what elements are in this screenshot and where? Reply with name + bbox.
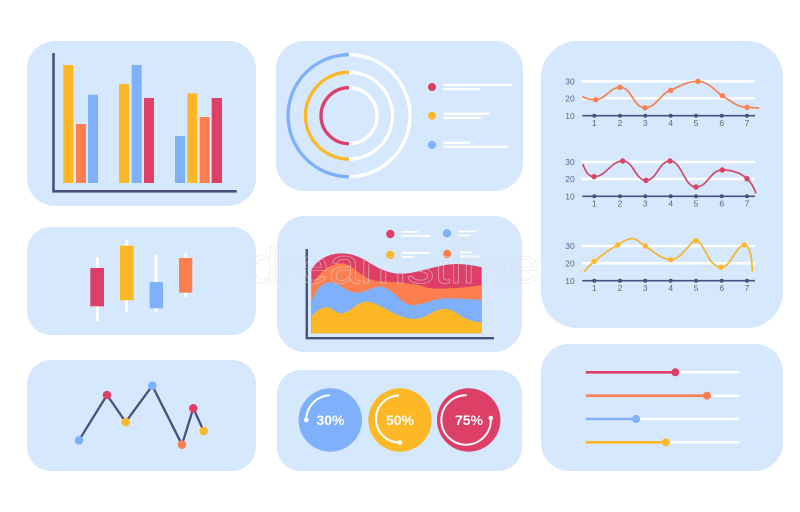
line chart: red: 1	[592, 199, 597, 209]
line chart: red: 5	[694, 199, 699, 209]
line chart: red: 2	[618, 199, 623, 209]
line chart: yellow: 5	[694, 283, 699, 293]
chart axes	[54, 53, 237, 191]
gauge: 75%: 75%	[455, 412, 484, 428]
panel background	[27, 227, 256, 335]
line chart: yellow: 2	[618, 283, 623, 293]
red candle	[90, 257, 104, 321]
line chart: yellow: 7	[745, 283, 750, 293]
line chart: orange: 3	[643, 118, 648, 128]
line chart: orange: 10	[565, 111, 575, 121]
middle ring	[306, 72, 392, 159]
panel: line charts	[541, 41, 783, 328]
slider: red	[586, 368, 739, 376]
yellow candle	[120, 240, 134, 312]
line chart: red: 3	[643, 199, 648, 209]
line chart: red: 20	[565, 174, 575, 184]
panel: percentage gauges	[277, 370, 522, 471]
panel: grouped bar chart	[27, 41, 256, 206]
blue candle	[150, 255, 163, 312]
line chart: yellow: 1	[592, 283, 597, 293]
line chart: red: 7	[745, 199, 750, 209]
polyline	[79, 386, 204, 445]
panel background	[27, 360, 256, 471]
slider: yellow	[586, 438, 739, 446]
panel background	[276, 41, 523, 191]
slider: orange	[586, 392, 739, 400]
bar group 1	[63, 65, 98, 183]
line chart: orange: 2	[618, 118, 623, 128]
line chart: yellow: 10	[565, 276, 575, 286]
bar group 2	[119, 65, 154, 183]
line chart: orange: 1	[592, 118, 597, 128]
line chart: yellow: 30	[565, 241, 575, 251]
inner ring	[321, 88, 377, 144]
line chart: yellow: 3	[643, 283, 648, 293]
line chart: red: 10	[565, 191, 575, 201]
panel: candlestick chart	[27, 227, 256, 335]
line chart: red: 30	[565, 157, 575, 167]
panel background	[541, 344, 783, 471]
legend	[386, 229, 480, 259]
stacked areas	[311, 253, 482, 333]
gauge: 30%: 30%	[316, 412, 345, 428]
line chart: orange: 4	[668, 118, 673, 128]
line chart: orange: 20	[565, 93, 575, 103]
bar group 3	[175, 93, 222, 183]
panel background	[277, 216, 522, 352]
data points	[75, 381, 208, 449]
orange candle	[179, 253, 192, 297]
line chart: orange: 5	[694, 118, 699, 128]
watermark: dreamstime	[248, 238, 540, 294]
gauge: 50%: 50%	[386, 412, 415, 428]
panel: sliders	[541, 344, 783, 471]
line chart: red	[565, 157, 756, 209]
gauge: 75%	[437, 388, 500, 452]
line chart: orange: 6	[719, 118, 724, 128]
panel: radial progress rings	[276, 41, 523, 191]
line chart: red: 4	[668, 199, 673, 209]
line chart: yellow: 20	[565, 258, 575, 268]
line chart: yellow	[565, 238, 755, 293]
outer ring	[288, 55, 410, 177]
slider: blue	[586, 415, 739, 423]
chart axes	[307, 249, 494, 338]
line chart: yellow: 6	[719, 283, 724, 293]
panel background	[277, 370, 522, 471]
gauge: 50%	[368, 388, 432, 452]
line chart: orange: 7	[745, 118, 750, 128]
line chart: red: 6	[719, 199, 724, 209]
panel: stacked area chart	[277, 216, 522, 352]
line chart: orange: 30	[565, 76, 575, 86]
panel background	[541, 41, 783, 328]
line chart: orange	[565, 76, 759, 128]
line chart: yellow: 4	[668, 283, 673, 293]
panel: point line chart	[27, 360, 256, 471]
panel background	[27, 41, 256, 206]
legend	[428, 83, 512, 149]
gauge: 30%	[299, 388, 362, 452]
